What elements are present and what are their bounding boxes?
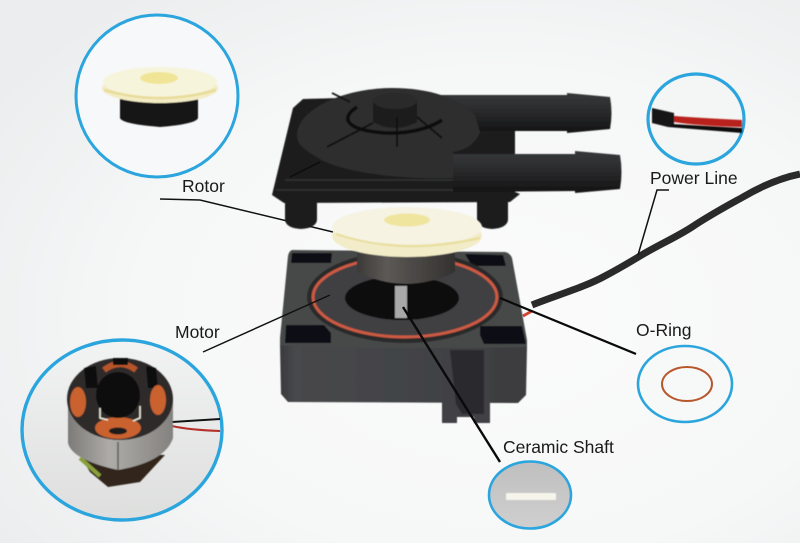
radial ribs (290, 93, 442, 177)
base top face (280, 250, 527, 348)
label: motor: Motor (175, 322, 220, 342)
leader line: motor (203, 295, 330, 352)
motor detail (67, 358, 173, 487)
power line circle (648, 74, 744, 164)
label: ceramic shaft: Ceramic Shaft (503, 437, 614, 457)
o-ring circle (638, 346, 732, 422)
base side wall (280, 345, 527, 403)
o-ring (313, 257, 497, 337)
shaft circle (489, 462, 571, 528)
power cable (523, 174, 800, 316)
clip tab (442, 348, 490, 423)
leader line: o-ring (500, 298, 636, 354)
pump base (280, 250, 527, 423)
shaft detail (506, 493, 556, 500)
o-ring detail (662, 367, 712, 401)
wire detail (652, 108, 742, 133)
pump cover (272, 88, 622, 229)
rotor hole (384, 214, 430, 226)
ceramic shaft in base (395, 286, 407, 318)
hub arc rib (348, 107, 442, 133)
label: o-ring: O-Ring (636, 320, 691, 340)
seal ring groove (307, 251, 503, 343)
callout: power line (648, 74, 744, 164)
leader line: power line (638, 190, 669, 255)
label: power line: Power Line (650, 168, 738, 188)
rotor flange top (332, 207, 482, 247)
rotor circle (76, 15, 238, 177)
rotor detail (102, 67, 218, 127)
motor circle (22, 340, 222, 520)
plate rim bands (276, 180, 518, 190)
motor wires (172, 419, 220, 422)
volute chamber (297, 88, 480, 178)
leader line: rotor (160, 199, 333, 232)
label: rotor: Rotor (182, 176, 225, 196)
cover feet (285, 198, 508, 229)
callout: ceramic shaft (489, 462, 571, 528)
leader line: ceramic shaft (403, 307, 500, 462)
callout: rotor (76, 15, 238, 177)
rotor flange edge (332, 215, 482, 257)
center hub (373, 101, 417, 128)
discharge pipes (415, 93, 622, 193)
motor well (345, 276, 459, 320)
callout: motor (22, 340, 222, 520)
corner screw holes (285, 253, 526, 344)
cover plate (272, 96, 520, 203)
callout: o-ring (638, 346, 732, 422)
rotor magnet (357, 245, 455, 284)
rotor (332, 207, 482, 284)
